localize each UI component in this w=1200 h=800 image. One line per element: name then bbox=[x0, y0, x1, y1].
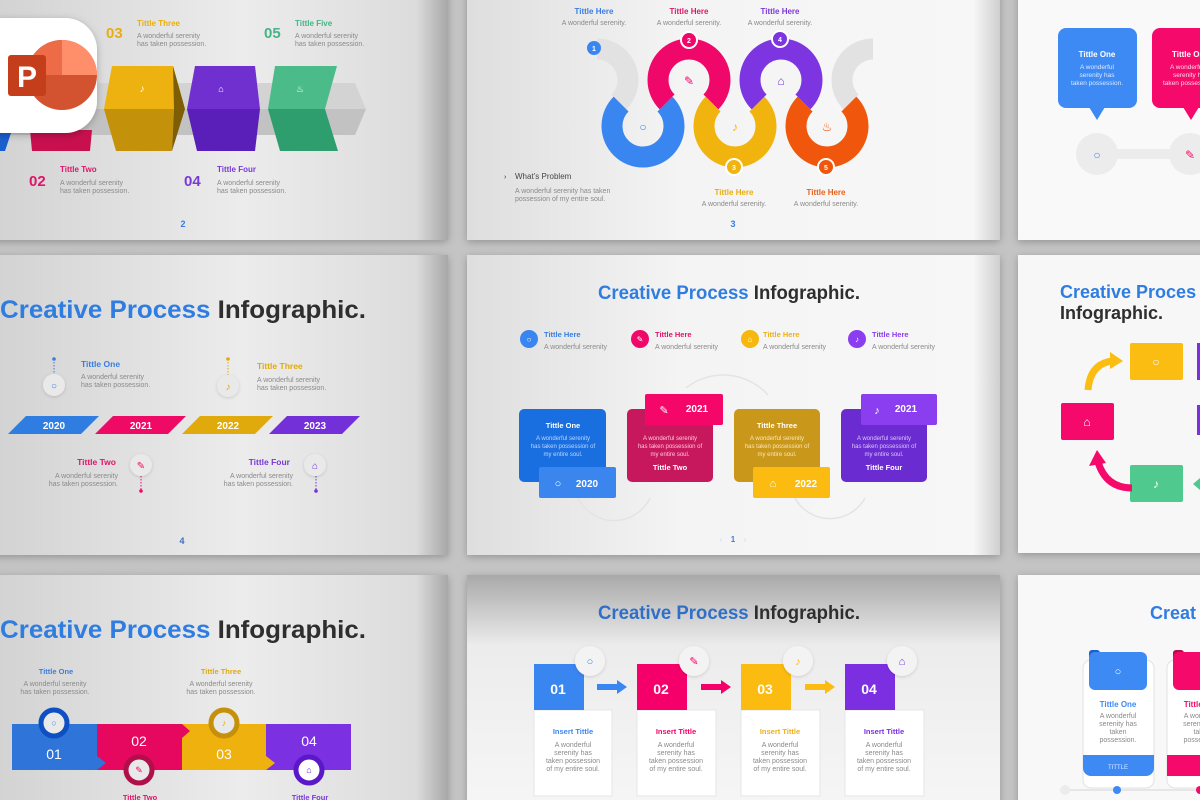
arrow: pink bbox=[1089, 450, 1132, 488]
step 02 label: A wonderful serenity bbox=[60, 180, 124, 187]
wave labels: Tittle Here bbox=[715, 188, 754, 197]
step 01: 01 bbox=[550, 681, 566, 697]
legend: Tittle Here bbox=[763, 330, 800, 339]
number badges: 4 bbox=[778, 37, 782, 44]
step 03 label bbox=[106, 19, 206, 48]
block: blue bbox=[0, 130, 12, 151]
step 05 label bbox=[264, 19, 364, 48]
card: Tittle One: A wonderful bbox=[1100, 713, 1137, 720]
block: green bbox=[268, 66, 338, 151]
milestone: Tittle Two: ✎ bbox=[137, 461, 145, 472]
step 04 bbox=[845, 646, 924, 796]
card: Tittle One: my entire soul. bbox=[543, 452, 583, 458]
legend: ○ bbox=[527, 335, 532, 344]
ring icons: ○ bbox=[639, 120, 647, 134]
milestone: Tittle Two: Tittle Two bbox=[77, 457, 116, 467]
milestone: Tittle Four: Tittle Four bbox=[249, 457, 291, 467]
year bars bbox=[8, 416, 360, 434]
circle icons: ⌂ bbox=[306, 765, 312, 775]
step 04: 04 bbox=[861, 681, 877, 697]
step 01: taken possession bbox=[546, 758, 600, 765]
box: green bbox=[1130, 465, 1183, 502]
wave labels: Tittle Here bbox=[761, 7, 800, 16]
title: Creative Proces bbox=[1060, 282, 1196, 302]
step 03: of my entire soul. bbox=[753, 766, 807, 773]
step 04 label: Tittle Four bbox=[217, 165, 256, 174]
year bars: 2023 bbox=[304, 421, 327, 432]
number badges: 5 bbox=[824, 165, 828, 172]
card: Tittle Three: 2022 bbox=[795, 479, 818, 490]
card: Tittle Three: has taken possession of bbox=[745, 444, 810, 450]
block: yellow: ♪ bbox=[140, 84, 144, 95]
step 05 label: 05 bbox=[264, 25, 281, 42]
what's problem text: › bbox=[504, 174, 507, 181]
title bbox=[1060, 282, 1196, 323]
card: Tittle Two: A wonderful serenity bbox=[643, 436, 697, 442]
step 01: of my entire soul. bbox=[546, 766, 600, 773]
milestone: Tittle Four bbox=[224, 454, 326, 493]
step 04: Insert Tittle bbox=[864, 727, 904, 736]
milestone: Tittle Two: A wonderful serenity bbox=[55, 473, 118, 480]
title: Creat bbox=[1150, 603, 1196, 623]
number badges: 3 bbox=[732, 165, 736, 172]
milestone: Tittle Four: has taken possession. bbox=[224, 481, 293, 488]
legend: Tittle Here bbox=[872, 330, 909, 339]
step 02: A wonderful bbox=[658, 742, 695, 749]
page number: 2 bbox=[180, 219, 186, 229]
milestone: Tittle One: ○ bbox=[51, 381, 57, 392]
step 03 label: A wonderful serenity bbox=[137, 33, 201, 40]
legend bbox=[520, 330, 936, 351]
card: Tittle One bbox=[519, 409, 616, 498]
step 02 label: Tittle Two bbox=[60, 165, 97, 174]
card: Tittle One: A wonderful serenity bbox=[536, 436, 590, 442]
card: Tittle Two: 2021 bbox=[686, 404, 709, 415]
ring icons: ⌂ bbox=[777, 74, 785, 88]
step 02: Insert Tittle bbox=[656, 727, 696, 736]
slide 4: timeline bbox=[0, 255, 448, 555]
milestone: Tittle Four: A wonderful serenity bbox=[230, 473, 293, 480]
card: Tittle Two: my entire soul. bbox=[650, 452, 690, 458]
what's problem text: possession of my entire soul. bbox=[515, 196, 605, 203]
strip segments bbox=[12, 724, 351, 770]
step 02 label bbox=[29, 165, 129, 195]
card: Tittle One: Tittle One bbox=[1100, 700, 1137, 709]
box: pink: ⌂ bbox=[1083, 415, 1091, 429]
card: Tittle One: taken bbox=[1109, 729, 1127, 736]
step 03: Insert Tittle bbox=[760, 727, 800, 736]
numbers: 02 bbox=[131, 733, 147, 749]
labels top: A wonderful serenity bbox=[189, 681, 253, 688]
milestone: Tittle Three: has taken possession. bbox=[257, 385, 326, 392]
wave labels: A wonderful serenity. bbox=[794, 201, 858, 208]
page number bbox=[720, 535, 747, 544]
wave labels: A wonderful serenity. bbox=[748, 20, 812, 27]
box: green: ♪ bbox=[1153, 477, 1159, 491]
wave labels: A wonderful serenity. bbox=[657, 20, 721, 27]
arrow 2 bbox=[701, 680, 731, 694]
card: Tittle One bbox=[1083, 650, 1154, 788]
step 03 label: Tittle Three bbox=[137, 19, 181, 28]
block: green: ♨ bbox=[296, 84, 304, 94]
ring icons: ✎ bbox=[684, 74, 694, 88]
legend: ✎ bbox=[637, 335, 643, 344]
wave labels: A wonderful serenity. bbox=[562, 20, 626, 27]
page number: 1 bbox=[731, 535, 736, 544]
step 03: ♪ bbox=[795, 656, 801, 668]
box: yellow: ○ bbox=[1152, 355, 1160, 369]
card: Tittle Four bbox=[841, 394, 937, 482]
block: purple: ⌂ bbox=[218, 84, 224, 94]
labels top: Tittle One bbox=[39, 667, 73, 676]
milestone: Tittle Three: Tittle Three bbox=[257, 361, 303, 371]
card: Tittle Three bbox=[734, 409, 830, 498]
slide 2: ribbon process bbox=[0, 0, 448, 240]
milestone: Tittle Three: ♪ bbox=[226, 382, 230, 393]
step 05 label: has taken possession. bbox=[295, 41, 364, 48]
step 04 label: 04 bbox=[184, 173, 201, 190]
step 04 label: A wonderful serenity bbox=[217, 180, 281, 187]
ring icons bbox=[639, 74, 832, 134]
legend: A wonderful serenity bbox=[544, 344, 608, 351]
what's problem text: What’s Problem bbox=[515, 172, 572, 181]
title: Creative Process Infographic. bbox=[0, 296, 366, 324]
slide: cycle (right middle) bbox=[1018, 255, 1200, 553]
step 04: of my entire soul. bbox=[857, 766, 911, 773]
card: Tittle One: 2020 bbox=[576, 479, 599, 490]
milestone: Tittle Two: has taken possession. bbox=[49, 481, 118, 488]
step 05 label: A wonderful serenity bbox=[295, 33, 359, 40]
wave labels bbox=[562, 7, 858, 208]
step 04: taken possession bbox=[857, 758, 911, 765]
title: Creative Process Infographic. bbox=[598, 603, 860, 624]
legend: A wonderful serenity bbox=[655, 344, 719, 351]
step 01 bbox=[534, 646, 612, 796]
milestone: Tittle Three: A wonderful serenity bbox=[257, 377, 321, 384]
labels top: Tittle Three bbox=[201, 667, 241, 676]
card: Tittle Four: my entire soul. bbox=[864, 452, 904, 458]
card: Tittle Four: 2021 bbox=[895, 404, 918, 415]
step 04 label: has taken possession. bbox=[217, 188, 286, 195]
legend: A wonderful serenity bbox=[872, 344, 936, 351]
connector pill: ○ bbox=[1093, 148, 1101, 162]
icon: powerpoint logo: P bbox=[17, 61, 37, 94]
numbers: 04 bbox=[301, 733, 317, 749]
legend: A wonderful serenity bbox=[763, 344, 827, 351]
card: Tittle One: ○ bbox=[555, 478, 561, 490]
partial shapes bbox=[1197, 343, 1200, 380]
card: Tittle Three: my entire soul. bbox=[757, 452, 797, 458]
slide 3: wave process bbox=[467, 0, 1000, 240]
card: Tittle Four: A wonderful serenity bbox=[857, 436, 911, 442]
step 01: Insert Tittle bbox=[553, 727, 593, 736]
step 05 label: Tittle Five bbox=[295, 19, 333, 28]
milestone: Tittle Two bbox=[49, 454, 152, 493]
number badges: 2 bbox=[687, 38, 691, 45]
faint arcs bbox=[578, 375, 865, 521]
legend: Tittle Here bbox=[544, 330, 581, 339]
progress line bbox=[1060, 785, 1200, 795]
bubble: blue: Tittle One bbox=[1079, 50, 1116, 59]
arrow 3 bbox=[805, 680, 835, 694]
milestone: Tittle One: Tittle One bbox=[81, 359, 120, 369]
step 02: serenity has bbox=[657, 750, 695, 757]
step 04: serenity has bbox=[865, 750, 903, 757]
title: Creative Process Infographic. bbox=[598, 283, 860, 304]
wave labels: A wonderful serenity. bbox=[702, 201, 766, 208]
card: Tittle One: possession. bbox=[1100, 737, 1137, 744]
wave rings bbox=[597, 49, 873, 157]
milestone: Tittle Three bbox=[217, 357, 326, 397]
milestone: Tittle One: A wonderful serenity bbox=[81, 374, 145, 381]
connector pill: ✎ bbox=[1185, 148, 1195, 162]
slide 5: arrow strip bbox=[0, 575, 448, 800]
card: Tittle Four: ♪ bbox=[874, 405, 880, 417]
card: Tittle One: has taken possession of bbox=[531, 444, 596, 450]
circle icons: ✎ bbox=[135, 765, 143, 775]
wave labels: Tittle Here bbox=[807, 188, 846, 197]
step 01: ○ bbox=[587, 656, 593, 668]
labels top: has taken possession. bbox=[186, 689, 256, 696]
wave labels: Tittle Here bbox=[575, 7, 614, 16]
numbers: 01 bbox=[46, 746, 62, 762]
bubble: blue: A wonderful bbox=[1080, 64, 1115, 71]
step 03 label: has taken possession. bbox=[137, 41, 206, 48]
legend: Tittle Here bbox=[655, 330, 692, 339]
milestone: Tittle One: has taken possession. bbox=[81, 382, 150, 389]
step 01: A wonderful bbox=[555, 742, 592, 749]
box: pink bbox=[1061, 403, 1114, 440]
circle icons: ♪ bbox=[222, 718, 226, 728]
numbers bbox=[46, 733, 317, 762]
step 03: serenity has bbox=[761, 750, 799, 757]
milestone: Tittle Four: ⌂ bbox=[312, 461, 318, 472]
card: Tittle One: Tittle One bbox=[546, 421, 580, 430]
block: yellow bbox=[104, 66, 185, 151]
block: pink bbox=[30, 130, 92, 151]
card: Tittle Three: ⌂ bbox=[770, 478, 776, 490]
step 02: of my entire soul. bbox=[649, 766, 703, 773]
step 04: ⌂ bbox=[899, 656, 905, 668]
number badges: 1 bbox=[592, 46, 596, 53]
step 02: taken possession bbox=[649, 758, 703, 765]
card: Tittle One: ○ bbox=[1115, 666, 1121, 678]
step 02: 02 bbox=[653, 681, 669, 697]
labels top bbox=[20, 667, 256, 696]
step 03 bbox=[741, 646, 820, 796]
labels top: has taken possession. bbox=[20, 689, 90, 696]
step 03: taken possession bbox=[753, 758, 807, 765]
what's problem text: A wonderful serenity has taken bbox=[515, 188, 610, 195]
legend: ♪ bbox=[855, 335, 859, 344]
step 04: A wonderful bbox=[866, 742, 903, 749]
card: Tittle Three: A wonderful serenity bbox=[750, 436, 804, 442]
card: Tittle Two: has taken possession of bbox=[638, 444, 703, 450]
card: Tittle One: TITTLE bbox=[1108, 765, 1128, 771]
year bars: 2021 bbox=[130, 421, 153, 432]
card: Tittle Two: ✎ bbox=[659, 405, 669, 417]
card: Tittle One: serenity has bbox=[1099, 721, 1137, 728]
labels bottom bbox=[123, 793, 328, 800]
ribbon band bbox=[0, 83, 366, 135]
page number: › bbox=[744, 535, 747, 544]
step 02 label: 02 bbox=[29, 173, 46, 190]
card: Tittle Four: Tittle Four bbox=[866, 463, 902, 472]
numbers: 03 bbox=[216, 746, 232, 762]
bubble: blue: serenity has bbox=[1079, 72, 1115, 79]
circle icons: ○ bbox=[51, 718, 57, 728]
card: Tittle Three: Tittle Three bbox=[757, 421, 797, 430]
bubble: blue: taken possession. bbox=[1071, 80, 1123, 87]
step 02 bbox=[637, 646, 716, 796]
ring icons: ♪ bbox=[732, 120, 738, 134]
ring icons: ♨ bbox=[822, 120, 832, 134]
box: yellow bbox=[1130, 343, 1183, 380]
card: Tittle Two bbox=[627, 394, 723, 482]
step 01: serenity has bbox=[554, 750, 592, 757]
arrow: yellow bbox=[1088, 352, 1123, 390]
card: pink partial bbox=[1167, 650, 1200, 788]
step 03 label: 03 bbox=[106, 25, 123, 42]
year bars: 2020 bbox=[43, 421, 66, 432]
page number: 4 bbox=[179, 536, 185, 546]
circle icons bbox=[41, 710, 322, 783]
page number: 3 bbox=[730, 219, 736, 229]
year bars: 2022 bbox=[217, 421, 240, 432]
slide: tab cards (right bottom) bbox=[1018, 575, 1200, 800]
slide: speech bubbles (right top) bbox=[1018, 0, 1200, 240]
page number: ‹ bbox=[720, 535, 723, 544]
title: Creative Process Infographic. bbox=[0, 616, 366, 644]
bubble: blue bbox=[1058, 28, 1137, 120]
bubble: pink bbox=[1152, 28, 1200, 120]
title: Infographic. bbox=[1060, 303, 1163, 323]
card: Tittle Four: has taken possession of bbox=[852, 444, 917, 450]
arrow 1 bbox=[597, 680, 627, 694]
labels top: A wonderful serenity bbox=[23, 681, 87, 688]
step 02 label: has taken possession. bbox=[60, 188, 129, 195]
step 03: A wonderful bbox=[762, 742, 799, 749]
card: Tittle Two: Tittle Two bbox=[653, 463, 688, 472]
legend: ⌂ bbox=[748, 335, 753, 344]
block: purple bbox=[187, 66, 260, 151]
slide 1: main cards bbox=[467, 255, 1000, 555]
connector pill bbox=[1076, 133, 1200, 175]
what's problem text bbox=[504, 172, 610, 203]
milestone: Tittle One bbox=[43, 357, 150, 396]
step 04 label bbox=[184, 165, 286, 195]
slide 6: numbered steps bbox=[467, 575, 1000, 800]
step 02: ✎ bbox=[689, 656, 699, 668]
number badges bbox=[587, 31, 834, 175]
icon: powerpoint logo bbox=[0, 18, 97, 133]
wave labels: Tittle Here bbox=[670, 7, 709, 16]
step 03: 03 bbox=[757, 681, 773, 697]
